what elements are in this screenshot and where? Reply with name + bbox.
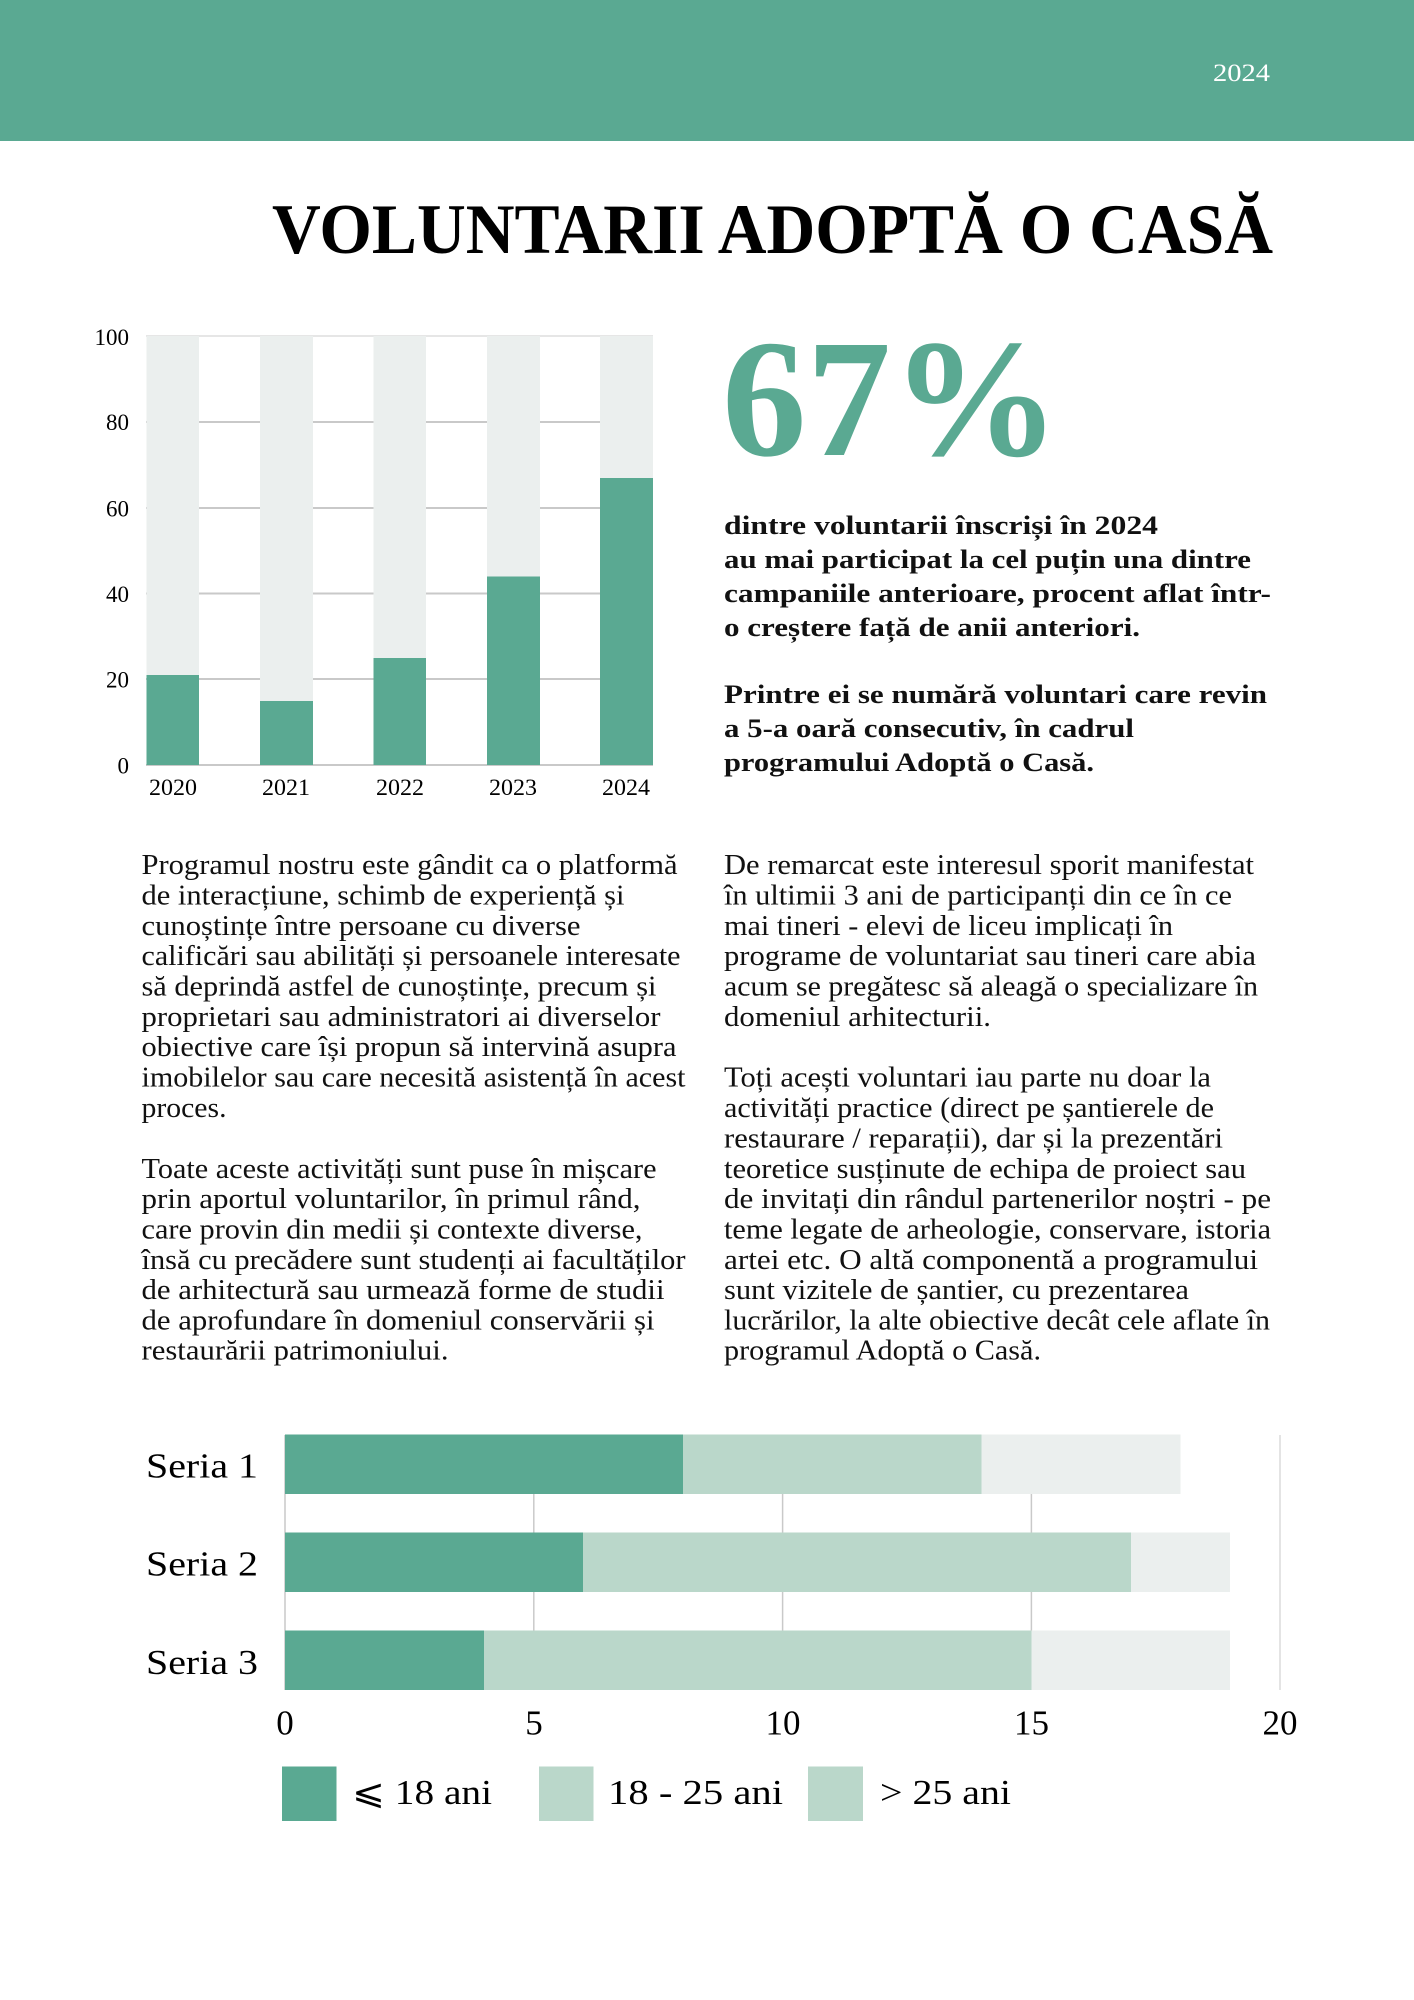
paragraph: activities: de invitați din rândul partenerilor noștri - pe [724,1184,1271,1215]
series 2 bar [285,1532,1230,1592]
x axis labels: 2022 [376,775,424,800]
series 1 bar [285,1434,1180,1494]
paragraph: younger participants: în ultimii 3 ani de participanți din ce în ce [723,880,1232,912]
statistic description: Printre ei se numără voluntari care revin [724,680,1268,709]
value axis labels: 15 [1014,1704,1049,1742]
y axis labels: 100 [94,325,129,350]
paragraph: younger participants: mai tineri - elevi de liceu implicați în [724,911,1173,942]
bar 2022 [374,336,426,765]
legend item: over 25: > 25 ani [880,1773,1011,1812]
legend item: up to 18: ⩽ 18 ani [352,1773,492,1812]
statistic description [724,511,1271,777]
paragraph: volunteers: însă cu precădere sunt studenți ai facultăților [140,1245,686,1276]
paragraph: activities: teme legate de arheologie, conservare, istoria [724,1214,1272,1246]
statistic description: au mai participat la cel puțin una dintre [724,545,1251,575]
x axis labels [149,775,651,800]
paragraph: platform: Programul nostru este gândit ca o platformă [142,850,678,881]
value axis labels: 10 [766,1704,800,1742]
y axis labels: 40 [106,582,129,607]
paragraph: volunteers: de aprofundare în domeniul conservării și [142,1306,655,1336]
value axis labels [276,1704,1298,1742]
bar 2020 [146,336,199,765]
title: VOLUNTARII ADOPTĂ O CASĂ [272,190,1273,269]
statistic description: dintre voluntarii înscriși în 2024 [724,511,1158,541]
value axis labels: 0 [276,1704,294,1742]
year label: 2024 [1213,60,1271,87]
x axis labels: 2023 [489,775,537,800]
statistic description: a 5-a oară consecutiv, în cadrul [724,714,1134,743]
legend item: up to 18 [282,1766,492,1821]
x axis labels: 2021 [262,775,310,800]
y axis labels: 20 [106,668,129,692]
x axis labels: 2024 [602,775,651,800]
bar chart: returning volunteers by year [94,325,653,800]
y axis labels: 60 [106,496,129,522]
paragraph: activities: artei etc. O altă componentă a programului [724,1245,1258,1276]
header band [0,0,1414,141]
y axis labels [94,325,129,778]
legend item: 18 to 25 [539,1766,783,1821]
paragraph: activities: activități practice (direct pe șantierele de [724,1093,1214,1124]
paragraph: activities [724,1062,1272,1366]
paragraph: volunteers [140,1154,686,1366]
paragraph: platform: proprietari sau administratori ai diverselor [142,1002,661,1033]
series labels: Seria 3 [146,1643,258,1682]
series labels [146,1446,258,1682]
paragraph: volunteers: Toate aceste activități sunt puse în mișcare [142,1154,656,1185]
paragraph: activities: programul Adoptă o Casă. [724,1336,1041,1366]
legend item: 18 to 25: 18 - 25 ani [608,1773,783,1812]
paragraph: younger participants: De remarcat este interesul sporit manifestat [724,850,1254,881]
x axis labels: 2020 [149,775,197,800]
body text: left column [140,850,686,1366]
paragraph: younger participants: domeniul arhitecturii. [724,1002,991,1033]
y axis labels: 0 [118,754,129,778]
y axis labels: 80 [106,410,129,435]
paragraph: platform: imobilelor sau care necesită asistență în acest [142,1062,686,1094]
body text: right column [723,850,1272,1366]
paragraph: activities: sunt vizitele de șantier, cu prezentarea [724,1275,1190,1306]
stacked bar chart: age groups by series [146,1434,1298,1742]
paragraph: volunteers: restaurării patrimoniului. [142,1336,448,1366]
paragraph: platform [142,850,686,1124]
paragraph: activities: Toți acești voluntari iau parte nu doar la [724,1062,1212,1094]
paragraph: platform: cunoștințe între persoane cu diverse [142,911,580,942]
series labels: Seria 1 [146,1446,258,1486]
legend item: over 25 [808,1766,1011,1821]
paragraph: volunteers: care provin din medii și contexte diverse, [142,1214,642,1246]
paragraph: platform: proces. [142,1093,226,1124]
paragraph: volunteers: prin aportul voluntarilor, în primul rând, [142,1184,640,1215]
paragraph: platform: să deprindă astfel de cunoștințe, precum și [142,972,657,1002]
statistic description: programului Adoptă o Casă. [724,748,1094,777]
paragraph: younger participants: acum se pregătesc să aleagă o specializare în [724,972,1258,1002]
bar 2024 [600,336,653,765]
paragraph: younger participants [723,850,1258,1033]
series labels: Seria 2 [146,1544,258,1584]
statistic description: campaniile anterioare, procent aflat într- [724,579,1271,608]
statistic description: o creștere față de anii anteriori. [724,613,1140,643]
series 3 bar [285,1630,1230,1690]
bar 2021 [260,336,313,765]
bar 2023 [487,336,540,765]
paragraph: platform: de interacțiune, schimb de experiență și [142,880,625,912]
value axis labels: 5 [525,1704,543,1742]
paragraph: platform: obiective care își propun să intervină asupra [142,1032,677,1063]
paragraph: volunteers: de arhitectură sau urmează forme de studii [142,1275,665,1306]
value axis labels: 20 [1262,1704,1298,1742]
legend [282,1766,1011,1821]
paragraph: activities: lucrărilor, la alte obiective decât cele aflate în [724,1306,1270,1336]
paragraph: activities: restaurare / reparații), dar și la prezentări [724,1124,1223,1154]
paragraph: activities: teoretice susținute de echipa de proiect sau [724,1154,1246,1185]
big statistic: 67% [722,306,1060,492]
paragraph: younger participants: programe de voluntariat sau tineri care abia [724,941,1257,972]
paragraph: platform: calificări sau abilități și persoanele interesate [142,941,680,972]
